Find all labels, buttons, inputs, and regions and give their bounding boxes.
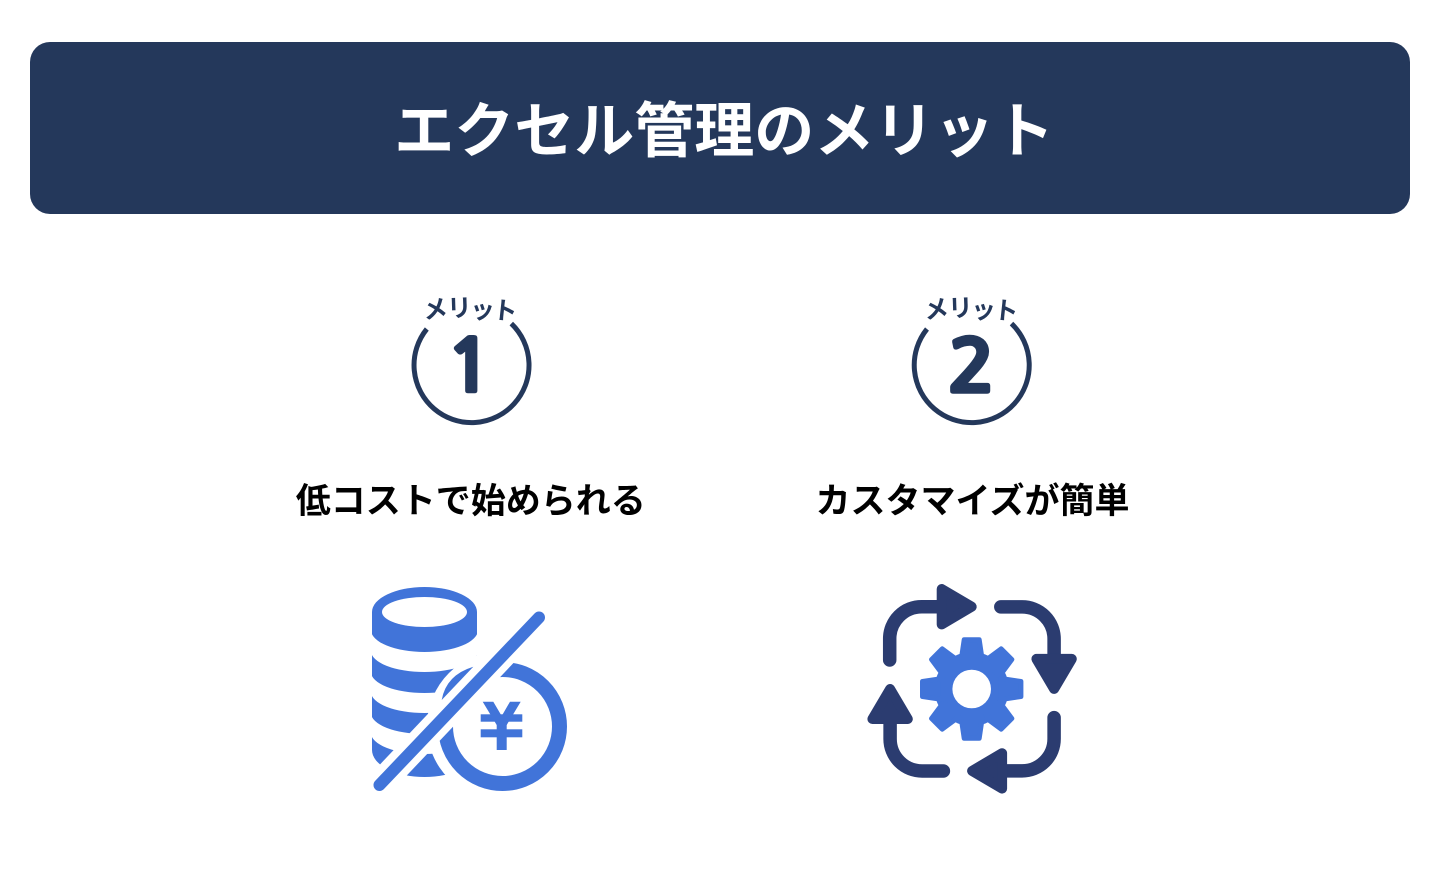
gear [922, 640, 1021, 738]
badge: merit 1: メリット [422, 295, 519, 327]
icon: coins and yen coin with slash [362, 587, 577, 803]
heading: merit 1: 低コストで始められる [296, 482, 646, 521]
title: エクセル管理のメリット [394, 98, 1054, 165]
arrow: bottom right [972, 718, 1054, 789]
header banner [30, 42, 1410, 214]
arrow: bottom left [872, 689, 943, 771]
badge: merit 1: 1 [446, 331, 493, 403]
arrow: top left [890, 589, 972, 660]
yen symbol [481, 702, 522, 750]
arrow: top right [1001, 607, 1072, 689]
heading: merit 2: カスタマイズが簡単 [816, 481, 1129, 521]
icon: gear with four cycle arrows [872, 589, 1072, 789]
badge: merit 2: 2 [948, 331, 995, 403]
badge: merit 2: メリット [923, 295, 1020, 327]
badge: merit 2 [914, 295, 1029, 423]
badge: merit 1 [414, 295, 529, 423]
